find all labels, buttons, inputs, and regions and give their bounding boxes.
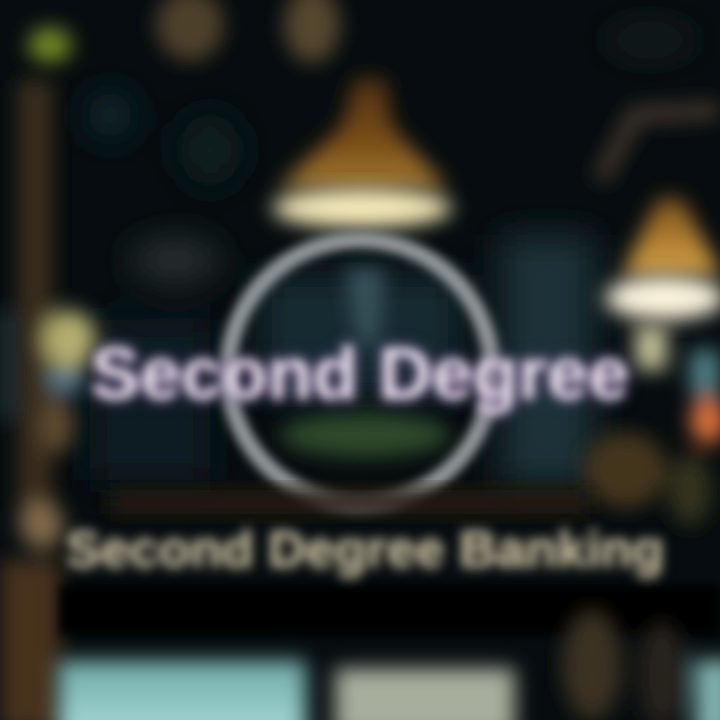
subtitle: Second Degree Banking: [66, 521, 664, 579]
ring interior details: [280, 268, 450, 457]
large circle ring: [228, 240, 492, 504]
lamp shade: [622, 198, 720, 275]
central pendant lamp: [272, 78, 452, 228]
lamp light: [272, 188, 452, 228]
top hanging tan shapes: [28, 0, 340, 63]
lamp shade: [278, 78, 448, 188]
black counter band: [60, 585, 720, 635]
main title: Second Degree: [91, 332, 629, 415]
dim teal window glow: [86, 28, 696, 485]
right pendant lamp: [605, 198, 720, 320]
right side details: [583, 110, 720, 526]
left wooden post: [0, 80, 96, 720]
shelf under ring: [110, 490, 590, 514]
lamp light: [605, 276, 720, 320]
bottom light panels: [58, 609, 720, 720]
